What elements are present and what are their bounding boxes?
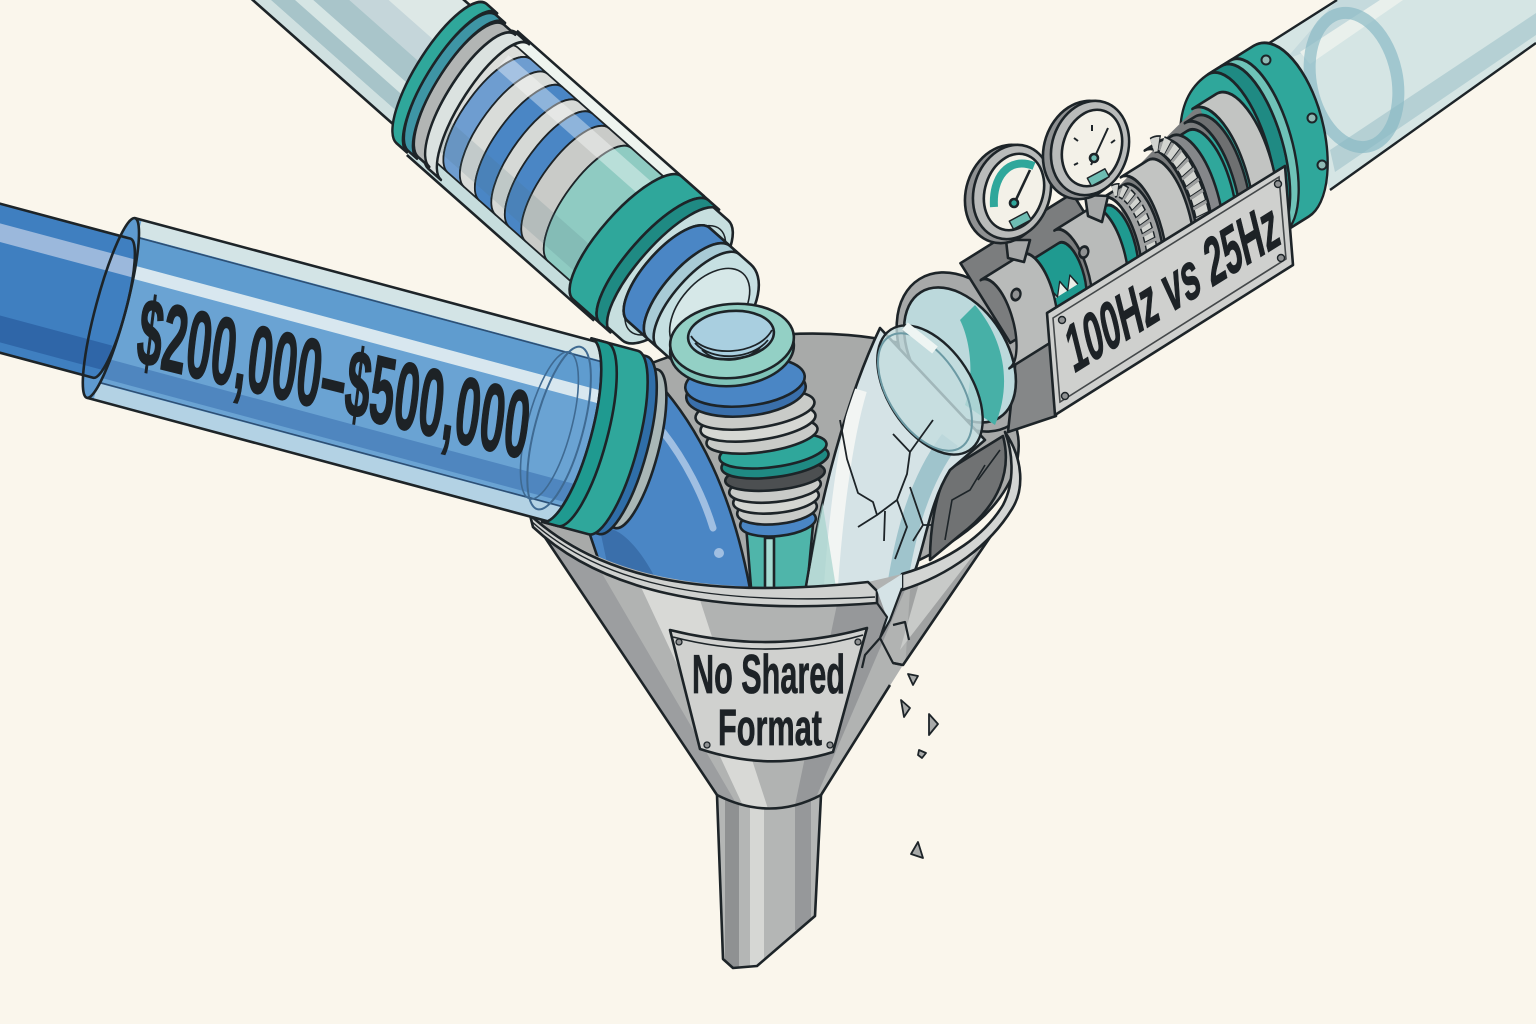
housing back — [960, 193, 1122, 343]
teal collar — [542, 338, 682, 546]
middle pipe — [130, 0, 791, 398]
nameplate line two: Format — [718, 699, 822, 756]
inner dark blue pipe — [0, 190, 144, 381]
falling ring stack — [667, 299, 831, 600]
pipe cracks — [840, 420, 933, 559]
left gauge — [953, 134, 1063, 262]
gear housing backing — [1106, 105, 1237, 279]
plate label: 100Hz vs 25Hz — [1059, 185, 1286, 387]
gauges — [953, 90, 1141, 262]
gear small — [1102, 174, 1173, 296]
plate: 100Hz vs 25Hz — [1047, 166, 1293, 415]
funnel crack — [862, 574, 909, 668]
nameplate line one: No Shared — [692, 643, 845, 705]
right gauge — [1031, 90, 1141, 222]
blue elbow pipe — [585, 364, 752, 600]
upstream teal collar — [377, 0, 530, 182]
clear sleeve body — [86, 216, 600, 521]
blue ring leaving the pipe — [609, 212, 778, 381]
downstream clear tube — [407, 31, 704, 321]
funnel nameplate — [670, 628, 867, 761]
blue pipe — [0, 202, 668, 536]
cracked clear elbow pipe — [804, 322, 986, 586]
upstream clear tube — [139, 0, 501, 138]
teal flange — [1165, 23, 1346, 272]
clear tube upper right — [1263, 0, 1536, 190]
funnel stem — [717, 790, 821, 970]
inner coloured rings seen through the tube — [415, 30, 680, 304]
gear large — [1145, 126, 1227, 284]
teal threaded section — [1025, 235, 1093, 333]
funnel back interior — [512, 307, 1034, 627]
flange bolts — [1262, 56, 1326, 170]
glass ring inside tube — [1298, 5, 1410, 155]
funnel cone — [544, 537, 992, 810]
sleeve rim outline — [72, 214, 149, 402]
downstream teal collar — [554, 159, 752, 362]
funnel — [525, 432, 1020, 970]
sleeve open rim — [72, 214, 149, 402]
infographic illustration: $200,000–$500,000 — [132, 277, 536, 480]
gray elbow cuff — [869, 247, 1061, 457]
funnel front rim, left — [530, 515, 877, 606]
funnel front rim, right — [902, 432, 1020, 590]
falling funnel shards — [901, 674, 938, 858]
top teal ring — [667, 299, 797, 391]
cuff one — [981, 245, 1066, 368]
mechanism housing — [926, 23, 1385, 401]
glass sleeve opening — [856, 307, 1004, 473]
cuff two — [1054, 198, 1137, 325]
right pipe — [869, 0, 1536, 457]
teal outlet tube — [746, 525, 813, 600]
